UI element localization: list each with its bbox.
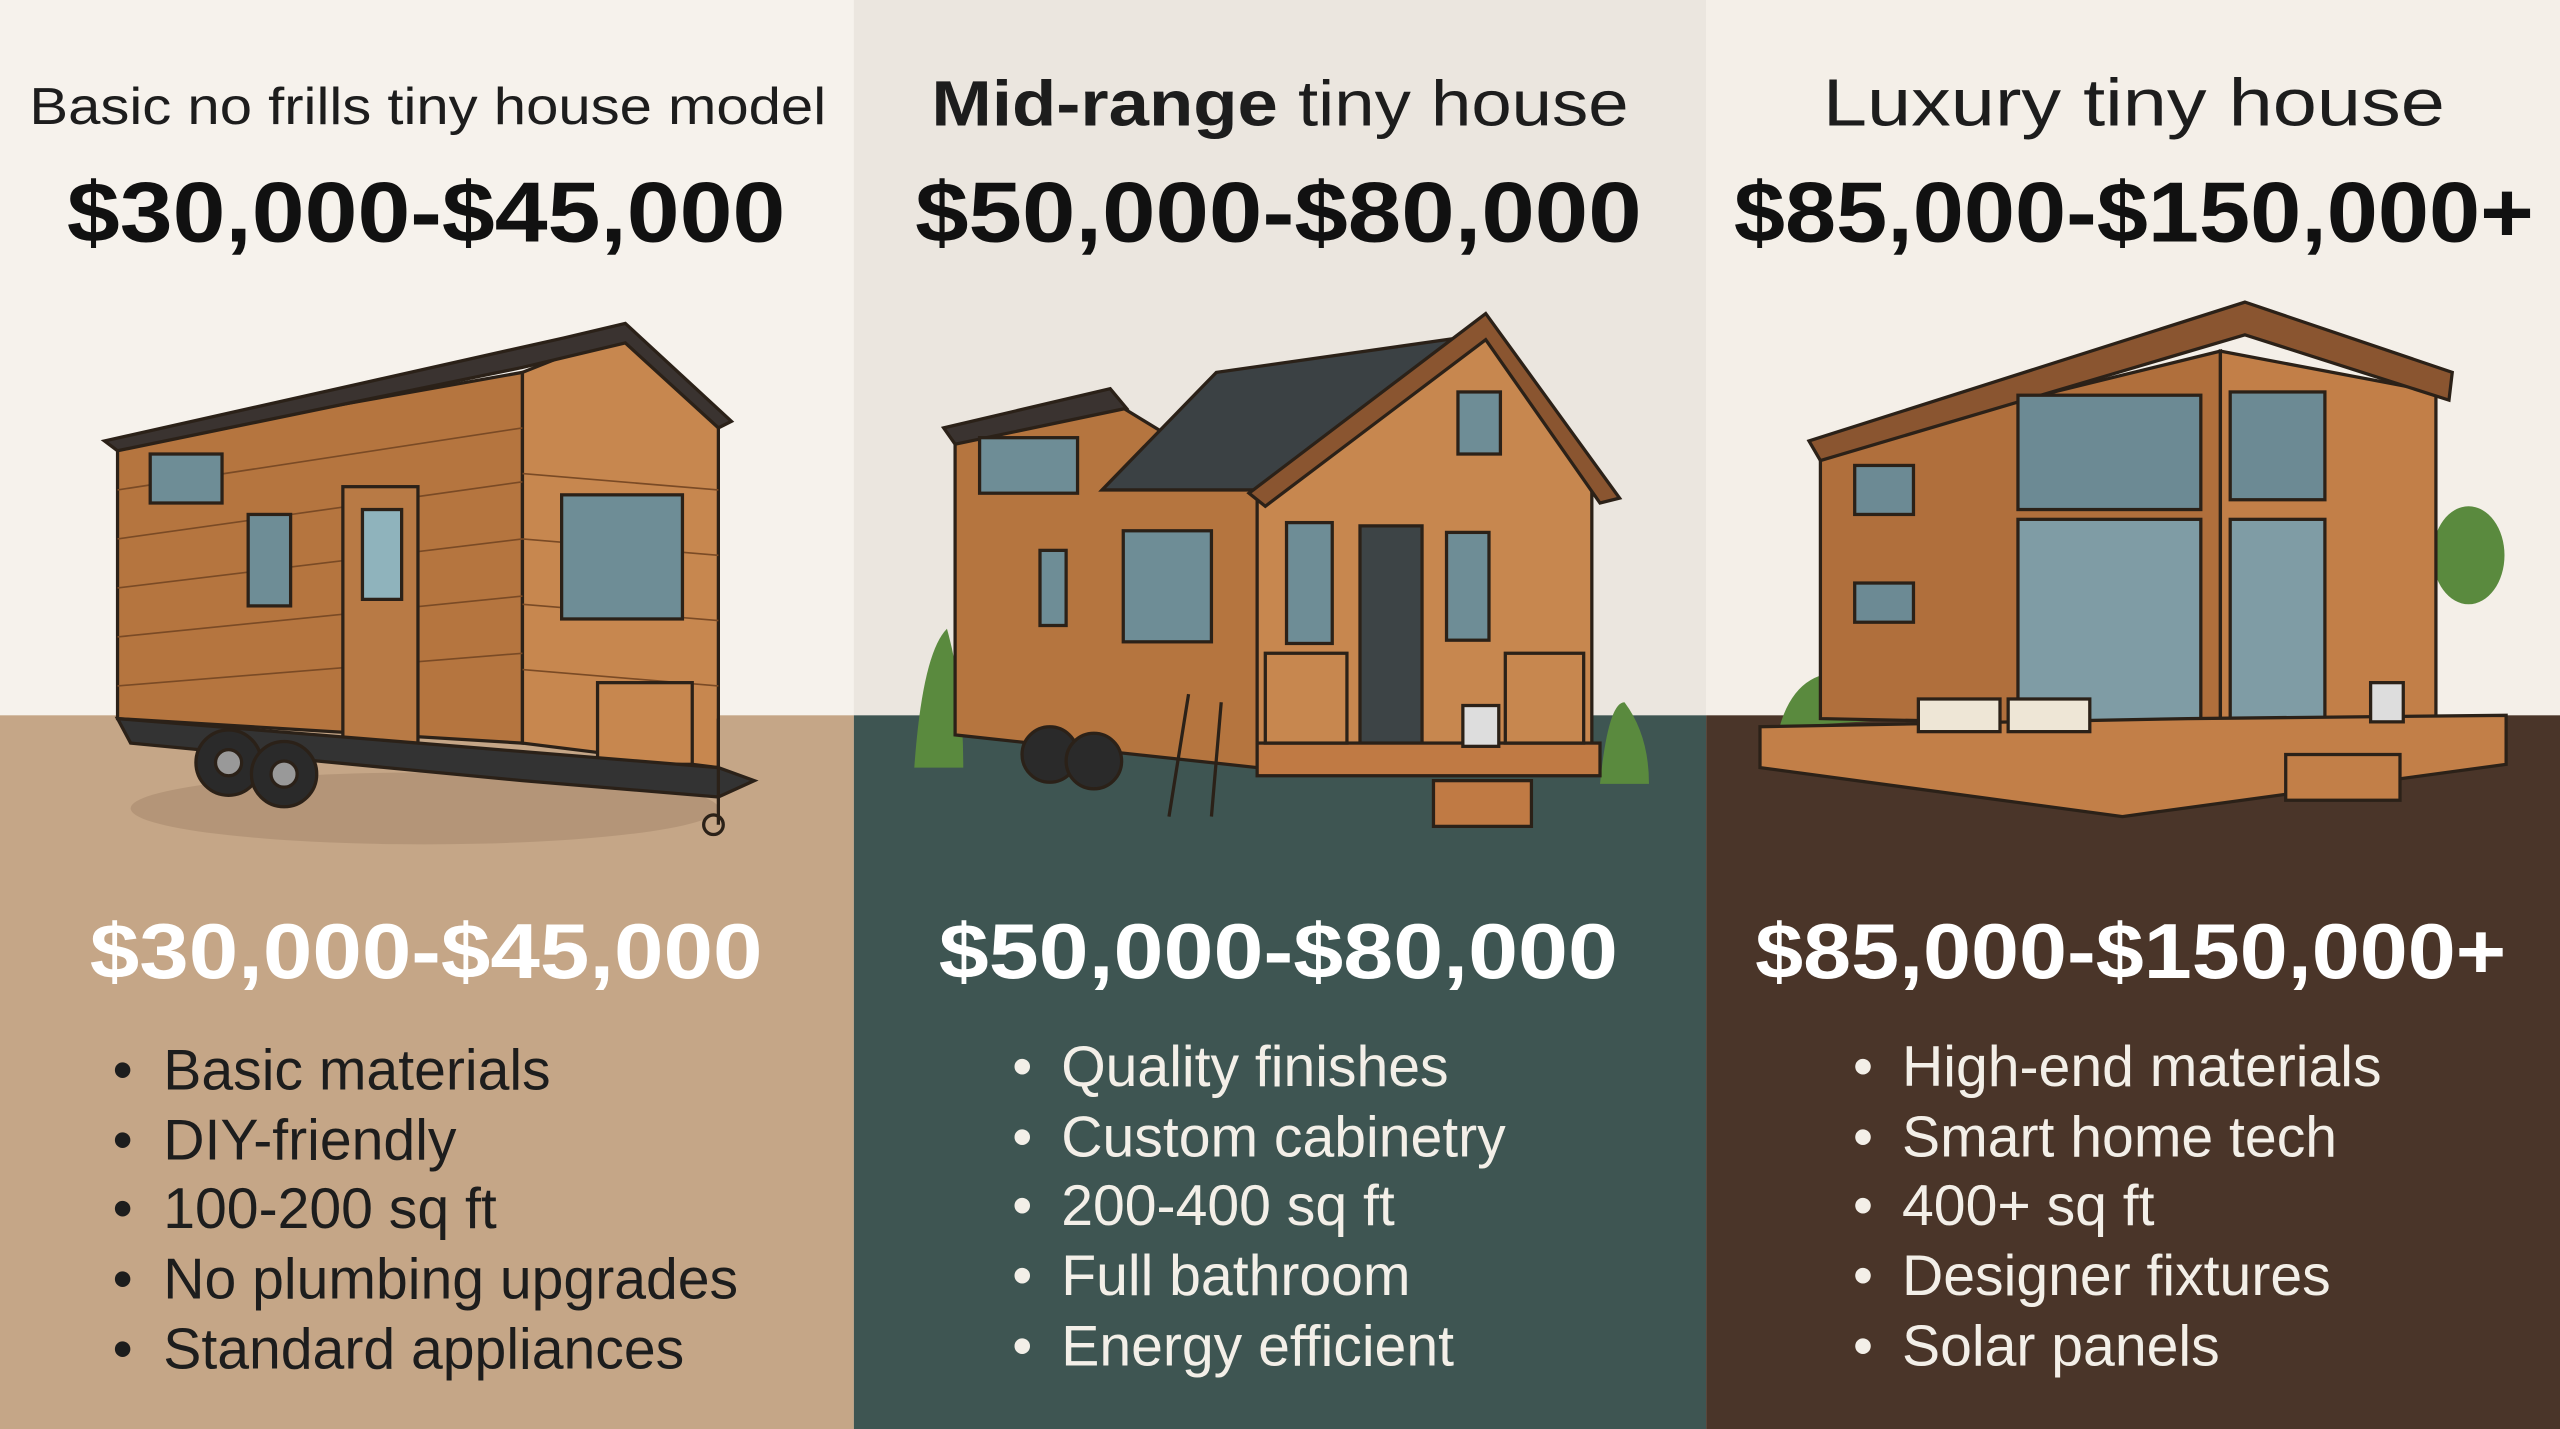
bullet list: basic: Basic materials bbox=[163, 1038, 551, 1102]
bullet list: luxury: • bbox=[1853, 1244, 1873, 1308]
bullet list: luxury bbox=[1853, 1035, 2382, 1378]
bullet list: luxury: Smart home tech bbox=[1902, 1105, 2337, 1169]
price: mid-range top: $50,000-$80,000 bbox=[915, 165, 1642, 260]
bullet list: basic: Standard appliances bbox=[163, 1318, 684, 1382]
bullet list: mid-range: • bbox=[1012, 1244, 1032, 1308]
bullet list: basic: • bbox=[113, 1038, 133, 1102]
price: basic bottom: $30,000-$45,000 bbox=[90, 907, 762, 995]
bullet list: basic: No plumbing upgrades bbox=[163, 1247, 738, 1311]
bullet list: luxury: High-end materials bbox=[1902, 1035, 2382, 1099]
bullet list: basic: • bbox=[113, 1109, 133, 1173]
heading: mid-range: Mid-range tiny house bbox=[931, 69, 1629, 140]
panel: mid-range bbox=[914, 69, 1649, 1378]
panel: basic bbox=[29, 78, 826, 1382]
price: mid-range bottom: $50,000-$80,000 bbox=[939, 907, 1618, 995]
price: luxury top: $85,000-$150,000+ bbox=[1734, 165, 2534, 260]
bullet list: luxury: • bbox=[1853, 1174, 1873, 1238]
bullet list: mid-range: • bbox=[1012, 1105, 1032, 1169]
bullet list: basic: • bbox=[113, 1177, 133, 1241]
bullet list: mid-range bbox=[1012, 1035, 1506, 1378]
price: luxury bottom: $85,000-$150,000+ bbox=[1755, 907, 2506, 995]
illustration: basic tiny house bbox=[104, 323, 754, 844]
bullet list: basic: 100-200 sq ft bbox=[163, 1177, 497, 1241]
bullet list: luxury: • bbox=[1853, 1035, 1873, 1099]
price: basic top: $30,000-$45,000 bbox=[67, 165, 785, 260]
bullet list: mid-range: Energy efficient bbox=[1061, 1314, 1454, 1378]
bullet list: mid-range: • bbox=[1012, 1174, 1032, 1238]
heading: luxury: Luxury tiny house bbox=[1823, 66, 2445, 141]
bullet list: basic: • bbox=[113, 1318, 133, 1382]
illustration: luxury tiny house bbox=[1760, 302, 2506, 817]
panel: luxury bbox=[1734, 66, 2534, 1378]
bullet list: luxury: Designer fixtures bbox=[1902, 1244, 2331, 1308]
bullet list: basic: DIY-friendly bbox=[163, 1109, 457, 1173]
bullet list: mid-range: Quality finishes bbox=[1061, 1035, 1449, 1099]
heading: basic: Basic no frills tiny house model bbox=[29, 78, 826, 136]
bullet list: basic bbox=[113, 1038, 738, 1382]
bullet list: luxury: 400+ sq ft bbox=[1902, 1174, 2155, 1238]
bullet list: mid-range: Custom cabinetry bbox=[1061, 1105, 1506, 1169]
bullet list: luxury: • bbox=[1853, 1105, 1873, 1169]
bullet list: mid-range: • bbox=[1012, 1314, 1032, 1378]
bullet list: mid-range: 200-400 sq ft bbox=[1061, 1174, 1395, 1238]
illustration: mid-range tiny house bbox=[914, 314, 1649, 826]
bullet list: basic: • bbox=[113, 1247, 133, 1311]
bullet list: mid-range: Full bathroom bbox=[1061, 1244, 1411, 1308]
bullet list: luxury: • bbox=[1853, 1314, 1873, 1378]
bullet list: luxury: Solar panels bbox=[1902, 1314, 2220, 1378]
bullet list: mid-range: • bbox=[1012, 1035, 1032, 1099]
